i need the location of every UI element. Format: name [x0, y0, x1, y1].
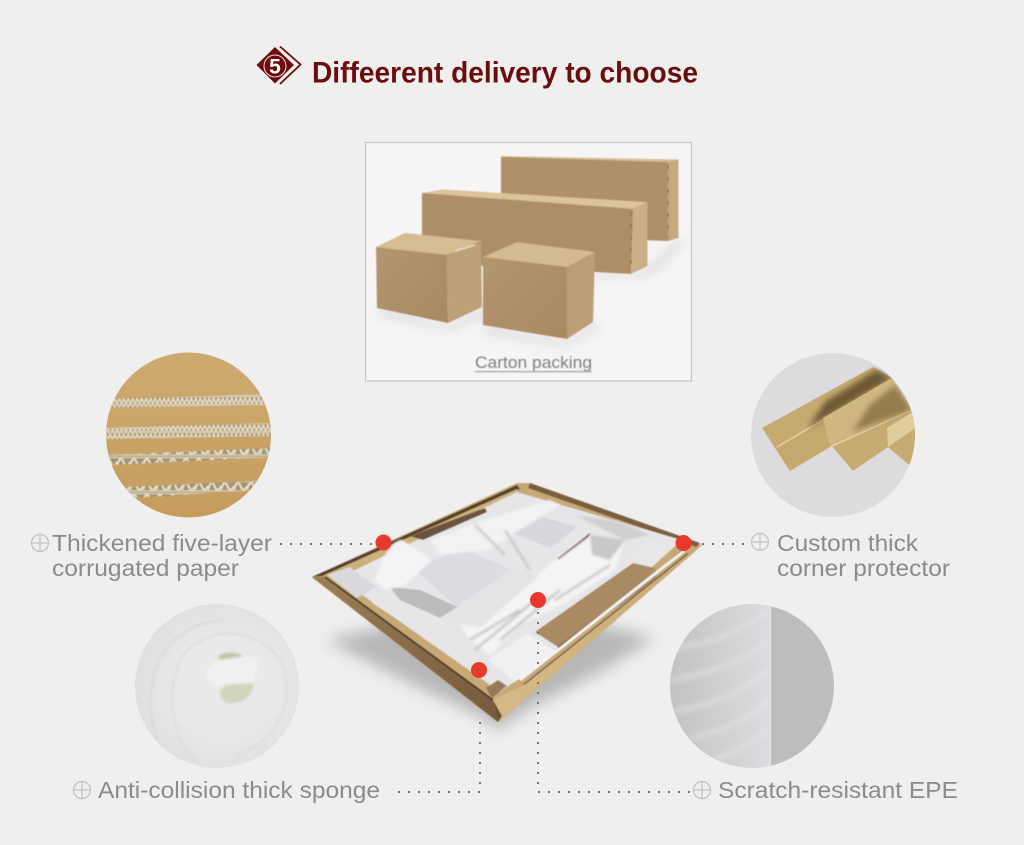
carton: back long box: [501, 156, 678, 241]
tray shadow: [325, 600, 655, 730]
icon: numbered diamond 5: 5: [269, 56, 281, 78]
tray side walls: [312, 545, 702, 722]
carton caption: Carton packing: [475, 353, 592, 372]
protector strip 2: [823, 378, 920, 471]
protector strip 3: [887, 412, 915, 465]
icon: numbered diamond 5: [256, 46, 300, 84]
photo: corrugated paper circle: [104, 352, 272, 518]
label: corner protector: Custom thick: [777, 530, 919, 556]
carton: middle long box: [422, 190, 648, 274]
packing tray illustration: [312, 483, 702, 730]
icon: plus circle: [694, 782, 710, 798]
label: EPE: Scratch-resistant EPE: [718, 777, 958, 803]
protector strip 1: [762, 367, 892, 471]
label: corrugated paper: Thickened five-layer: [52, 530, 272, 556]
red marker dots: [376, 534, 692, 678]
title block: [256, 46, 698, 90]
carton: small right box: [483, 242, 595, 339]
photo: sponge roll circle: [135, 604, 299, 768]
tray inner foam and wrap: [327, 492, 688, 698]
photo: EPE foam circle: [670, 604, 835, 768]
photo: corner protector circle: [751, 353, 920, 517]
plastic wrap folds: [375, 500, 650, 655]
title text: Diffeerent delivery to choose: [312, 56, 698, 90]
icon: plus circle: [32, 534, 48, 552]
icon: plus circle: [752, 534, 768, 550]
label: corner protector: corner protector: [777, 555, 950, 581]
carton: small left box: [376, 233, 482, 323]
label: sponge: Anti-collision thick sponge: [98, 777, 380, 803]
box shadows: [378, 238, 684, 347]
label: corrugated paper: [32, 530, 272, 581]
label: corrugated paper: corrugated paper: [52, 555, 239, 581]
icon: plus circle: [74, 782, 90, 798]
tray outer frame: [312, 483, 702, 722]
label: corner protector: [752, 530, 950, 581]
callout: dotted connector lines: [280, 544, 746, 792]
panel: carton packing: [366, 142, 692, 381]
